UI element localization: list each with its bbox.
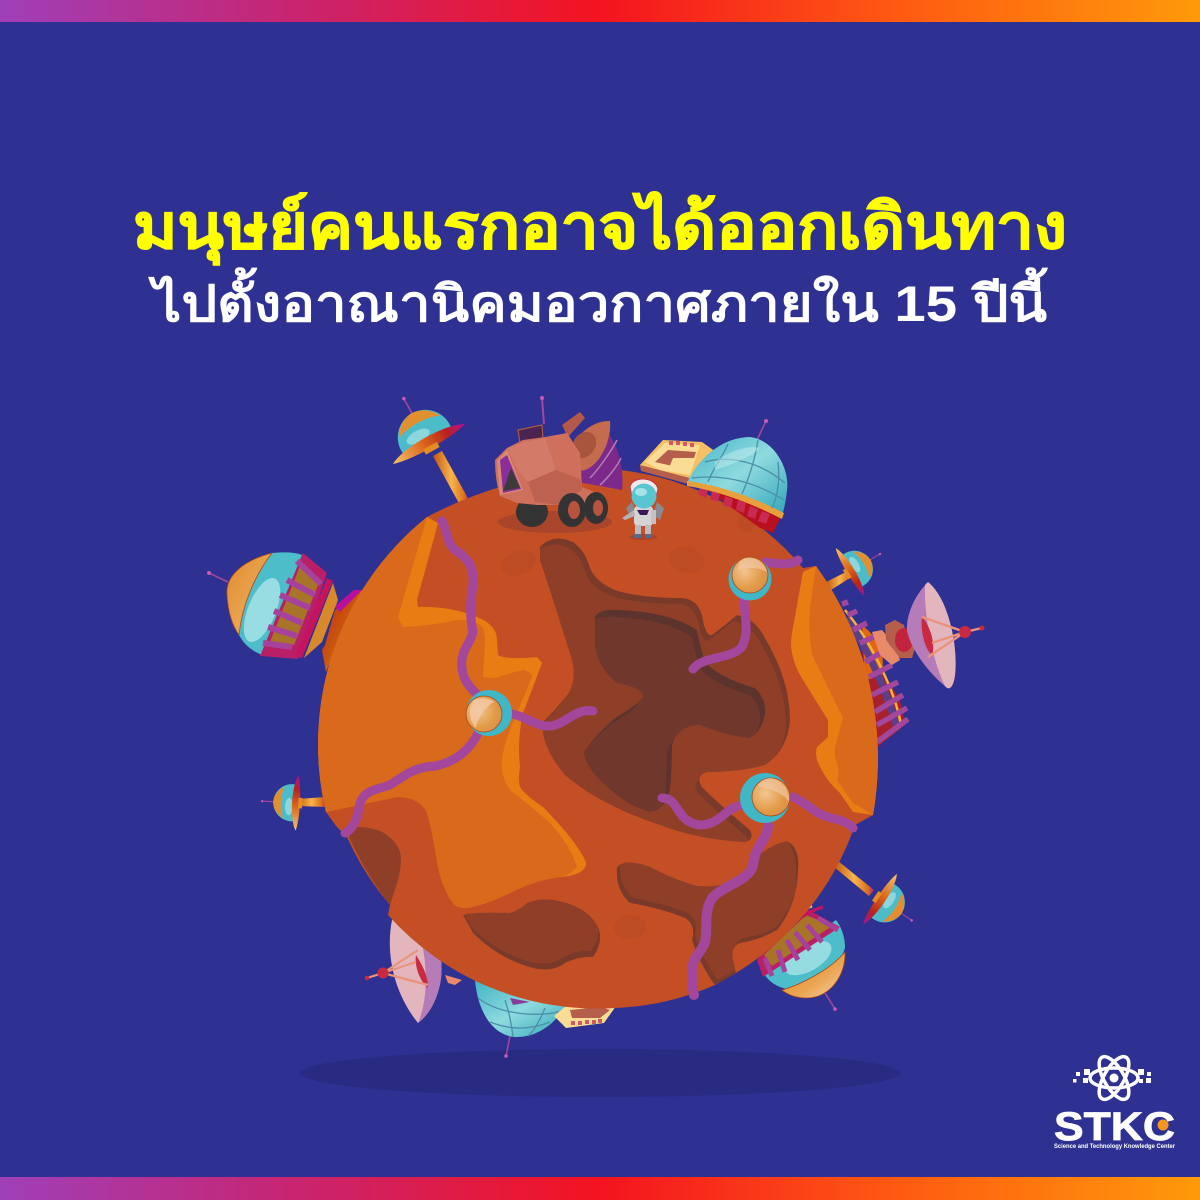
icon: capsule habitat right with struts <box>842 602 915 748</box>
crater central <box>536 538 790 848</box>
crater lower right <box>617 836 801 985</box>
pipeline 5 <box>765 560 798 564</box>
icon: astronaut <box>622 479 664 538</box>
icon: bottom dome <box>475 980 568 1058</box>
rover front wheels <box>558 492 608 527</box>
title line 2: ไปตั้งอาณานิคมอวกาศภายใน 15 ปีนี้ <box>147 267 1048 332</box>
node 2 <box>728 557 772 600</box>
rover antenna <box>540 396 544 424</box>
icon: bottom building <box>554 1006 616 1028</box>
right landmass <box>809 566 878 815</box>
icon: top dome <box>687 419 787 533</box>
crater bottom <box>461 893 600 970</box>
rover body <box>495 433 600 505</box>
pipeline 7 <box>793 797 853 828</box>
logo orange dot <box>1158 1120 1168 1130</box>
node 1 <box>466 690 512 736</box>
logo: STKC <box>1054 1052 1176 1150</box>
planet ground shadow <box>300 1049 900 1097</box>
rover rear-left wheel <box>516 497 548 527</box>
title <box>133 191 1067 332</box>
rover shadow <box>498 511 612 533</box>
logo tagline: Science and Technology Knowledge Center <box>1054 1144 1176 1150</box>
icon: radar dish right <box>907 582 984 688</box>
astronaut shadow <box>629 534 657 540</box>
rover dish <box>562 412 623 490</box>
planet body <box>318 470 878 1009</box>
crater central deep <box>579 610 765 819</box>
pipelines and nodes <box>345 521 853 995</box>
icon: building behind top dome <box>640 440 716 484</box>
icon: saucer tower top left <box>367 377 470 507</box>
icon: capsule habitat left <box>207 552 362 672</box>
rover solar panel <box>518 425 543 443</box>
pipeline 2 <box>345 733 478 833</box>
pipeline 3 <box>507 711 593 726</box>
top gradient bar <box>0 0 1200 22</box>
logo wordmark: STKC <box>1054 1105 1175 1149</box>
logo atom icon <box>1073 1052 1151 1104</box>
icon: rover <box>495 396 623 527</box>
left landmass <box>318 517 577 908</box>
pipeline 4 <box>693 600 746 669</box>
right landmass bright rim <box>791 566 878 815</box>
icon: saucer tower right <box>826 530 895 598</box>
surface spots <box>497 513 757 939</box>
left landmass bright rim <box>318 517 586 908</box>
icon: radar dish bottom left <box>365 920 462 1023</box>
planet <box>318 470 878 1009</box>
node 3 <box>740 773 790 823</box>
rover window <box>497 450 523 495</box>
pipeline 6 <box>662 798 742 825</box>
bottom gradient bar <box>0 1177 1200 1200</box>
icon: saucer tower bottom right <box>834 861 930 946</box>
icon: capsule habitat bottom right <box>757 906 845 1011</box>
icon: saucer tower left small <box>259 773 326 831</box>
crater lower left <box>348 827 401 905</box>
title line 1: มนุษย์คนแรกอาจได้ออกเดินทาง <box>133 191 1067 265</box>
pipeline 8 <box>692 825 768 995</box>
pipeline 1 <box>442 521 478 695</box>
